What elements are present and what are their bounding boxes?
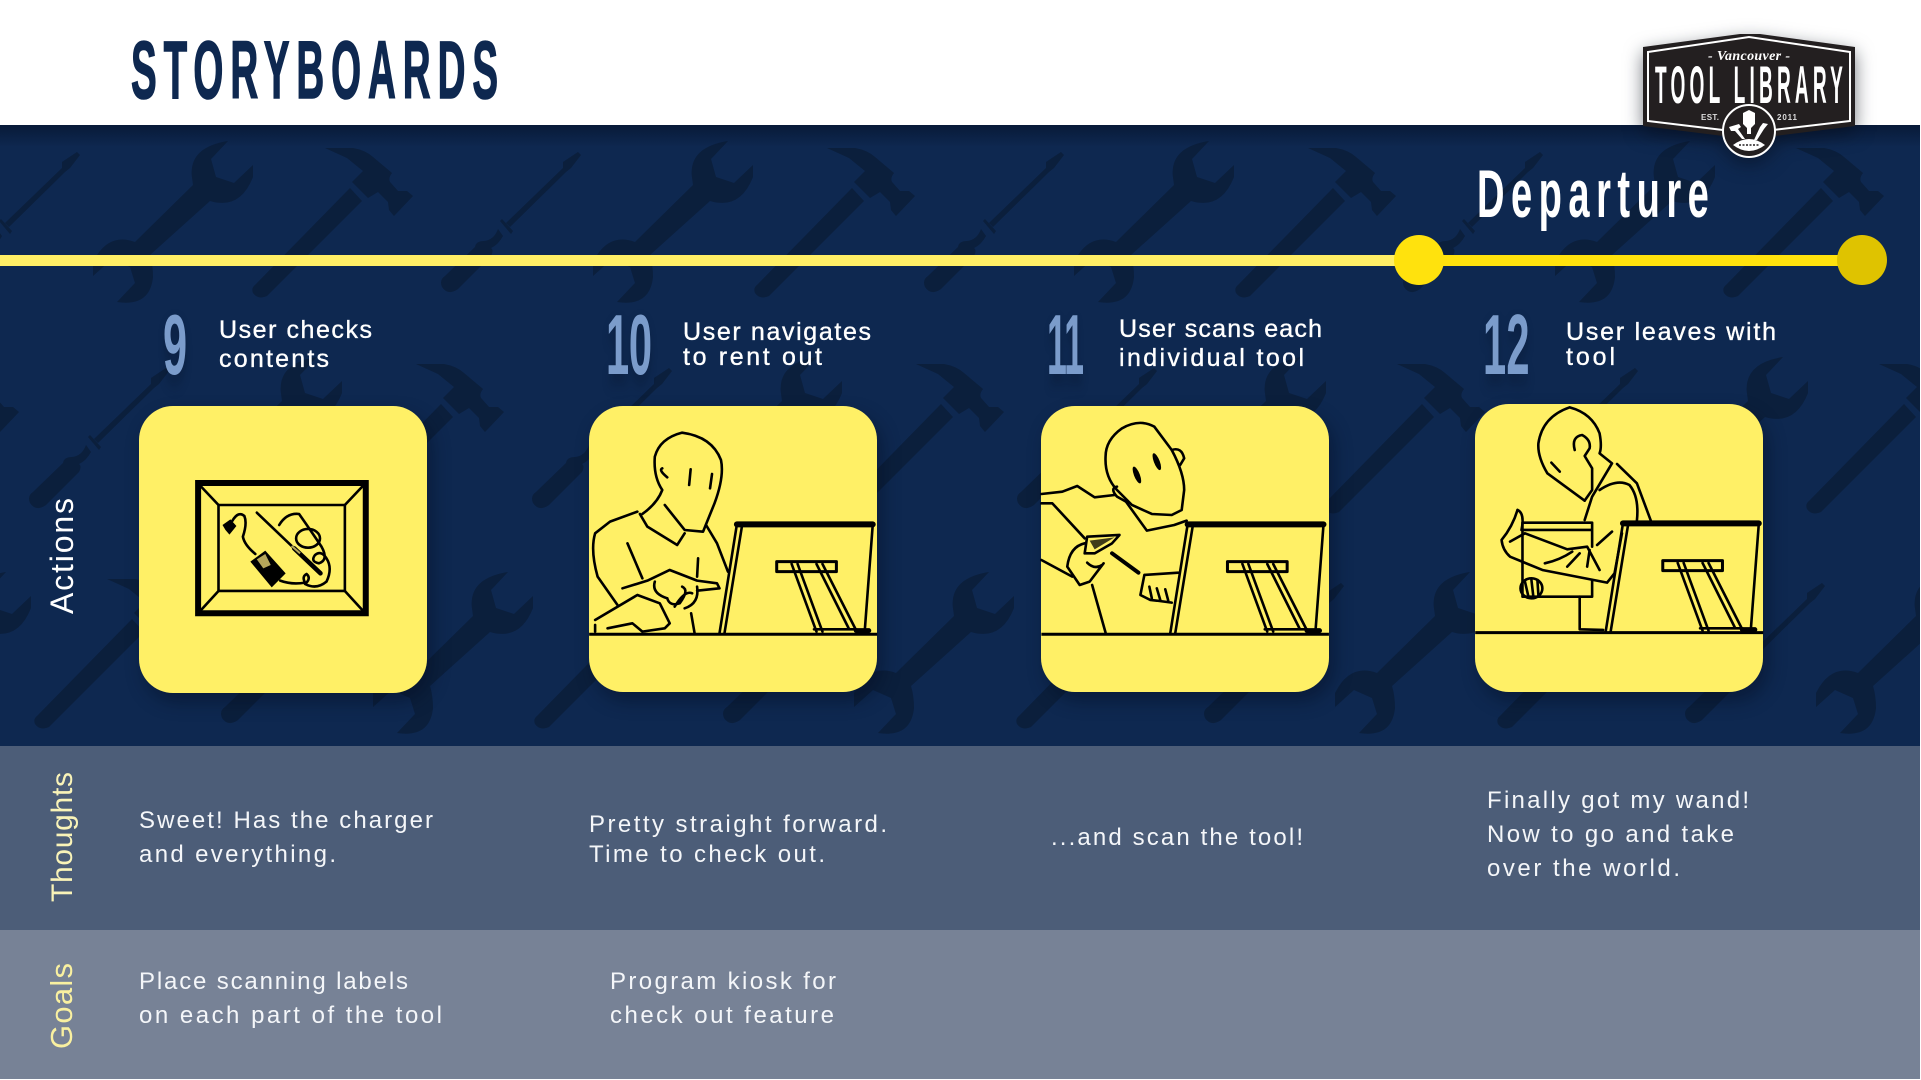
thought: step 10 <box>589 811 887 868</box>
step 12 heading: User leaves with <box>1566 318 1776 346</box>
row label: Thoughts: Thoughts <box>46 772 79 902</box>
goal: step 10 <box>610 968 836 1029</box>
heading: Departure: Departure <box>1477 155 1709 232</box>
thought: step 9: Sweet! Has the charger <box>139 807 433 834</box>
thought: step 9: and everything. <box>139 841 336 868</box>
logo: Vancouver Tool Library: - Vancouver - <box>1708 49 1790 64</box>
step 9 heading: 9 <box>163 298 187 393</box>
thought: step 10: Time to check out. <box>589 841 825 868</box>
timeline <box>0 235 1887 285</box>
row label: Goals: Goals <box>44 963 79 1049</box>
logo: Vancouver Tool Library <box>1643 34 1855 157</box>
step 10 heading: to rent out <box>683 343 822 371</box>
background tool pattern <box>0 141 1921 734</box>
step 9 heading: contents <box>219 345 329 373</box>
card 11: user scanning a tool <box>1041 406 1329 692</box>
thought: step 10: Pretty straight forward. <box>589 811 887 838</box>
thought: step 12: Now to go and take <box>1487 821 1734 848</box>
logo: Vancouver Tool Library: EST. <box>1701 113 1719 122</box>
step 11 heading: User scans each <box>1119 315 1322 343</box>
card 9: open box with charger <box>139 406 427 693</box>
goal: step 9 <box>139 968 442 1029</box>
goal: step 10: Program kiosk for <box>610 968 836 995</box>
step 12 heading: tool <box>1566 343 1615 371</box>
thought: step 11: ...and scan the tool! <box>1051 824 1303 851</box>
logo: Vancouver Tool Library: 2011 <box>1777 113 1798 122</box>
row label: Actions: Actions <box>44 498 80 614</box>
panel: thoughts band <box>0 746 1920 930</box>
step 9 heading: User checks <box>219 316 372 344</box>
goal: step 9: on each part of the tool <box>139 1002 442 1029</box>
panel: actions <box>0 125 1921 747</box>
panel: goals band <box>0 930 1920 1079</box>
thought: step 12: Finally got my wand! <box>1487 787 1749 814</box>
thought: step 12: over the world. <box>1487 855 1680 882</box>
thought: step 9 <box>139 807 433 868</box>
logo: Vancouver Tool Library: TOOL LIBRARY <box>1655 56 1843 115</box>
step 12 heading <box>1483 298 1776 393</box>
step 10 heading: User navigates <box>683 318 871 346</box>
step 9 heading <box>163 298 372 393</box>
goal: step 10: check out feature <box>610 1002 834 1029</box>
title: STORYBOARDS <box>131 24 498 116</box>
step 10 heading <box>606 298 871 393</box>
step 10 heading: 10 <box>606 298 652 393</box>
step 11 heading: 11 <box>1047 297 1084 392</box>
header background <box>0 0 1921 125</box>
step 11 heading: individual tool <box>1119 344 1304 372</box>
step 11 heading <box>1047 297 1322 392</box>
card 10: user navigating kiosk <box>589 406 877 692</box>
step 12 heading: 12 <box>1483 298 1530 393</box>
thought: step 12 <box>1487 787 1749 882</box>
card 12: user leaving with tool <box>1475 404 1763 692</box>
goal: step 9: Place scanning labels <box>139 968 408 995</box>
